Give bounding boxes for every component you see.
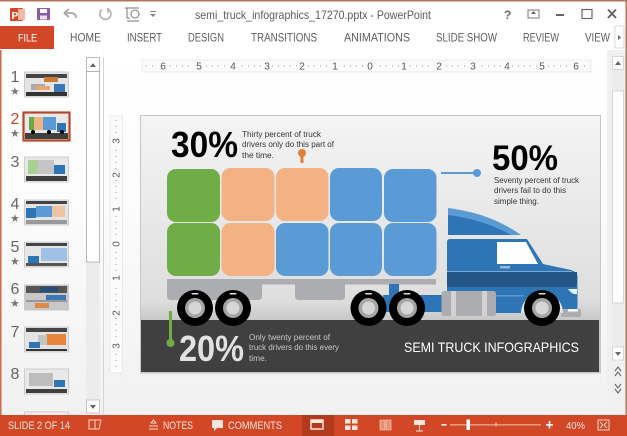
vertical ruler: 2: [112, 172, 122, 178]
horizontal ruler: 5: [539, 62, 545, 72]
ribbon tabs: REVIEW: [523, 32, 559, 44]
text: 50% description: drivers fail to do this: [494, 186, 566, 195]
thumbnail scrollbar: [86, 57, 100, 413]
text: 30% description: the time.: [242, 151, 274, 160]
stat: 30%: [171, 124, 335, 165]
horizontal ruler: 6: [573, 62, 579, 72]
door handle: [500, 266, 510, 268]
ribbon tabs: INSERT: [127, 32, 162, 44]
vertical ruler: 3: [112, 138, 122, 144]
slide numbers: 1: [11, 69, 20, 86]
main scrollbar: [607, 50, 626, 416]
thumbnail 8: [24, 369, 68, 394]
slide numbers: 5: [11, 239, 20, 256]
left border: [0, 50, 2, 416]
window title: semi_truck_infographics_17270.pptx - PowerPoint: [195, 8, 432, 22]
thumbnail 9 partial: [24, 412, 68, 418]
transition stars: [10, 86, 20, 310]
icon: save: [37, 8, 50, 20]
horizontal ruler: [142, 60, 591, 72]
trailer cargo boxes: [167, 168, 436, 276]
title bar: [0, 0, 627, 50]
icon: redo: [100, 8, 111, 19]
text: 50% description: [494, 176, 579, 206]
wheel: drive 2: [389, 290, 425, 326]
window: [497, 242, 538, 264]
horizontal ruler: 5: [196, 62, 202, 72]
ribbon tabs: HOME: [70, 32, 101, 44]
stat: 20%: [179, 328, 339, 369]
ribbon tabs: FILE: [18, 32, 37, 44]
icon: spelling book: [89, 420, 101, 429]
comments button: [212, 420, 282, 432]
horizontal ruler: 0: [367, 62, 373, 72]
fit to window button: [598, 420, 609, 430]
vertical ruler: 1: [112, 275, 122, 281]
text: 30% description: [242, 130, 335, 160]
slide numbers: 8: [11, 366, 20, 383]
transition stars: ★: [10, 213, 20, 225]
slide numbers: 7: [11, 324, 20, 341]
quick access dropdown: [150, 11, 156, 17]
ribbon tabs: [0, 26, 624, 49]
horizontal ruler: 3: [470, 62, 476, 72]
wheel: trailer 1: [177, 290, 213, 326]
icon: orange pin: [298, 149, 306, 163]
text: 30% description: Thirty percent of truck: [242, 130, 321, 139]
headlight: [568, 289, 577, 294]
status bar: [0, 415, 627, 436]
vertical ruler: 0: [112, 241, 122, 247]
text: 20% description: truck drivers do this every: [249, 343, 339, 352]
roof fairing: [448, 208, 521, 235]
fuel tank: [442, 291, 496, 316]
horizontal ruler: 2: [299, 62, 305, 72]
ribbon tabs: TRANSITIONS: [251, 32, 317, 44]
window controls: [504, 8, 616, 22]
wheels: [177, 290, 560, 326]
notes button: [149, 420, 193, 432]
stat: 20%: 20%: [179, 328, 244, 369]
thumbnail 3: [24, 157, 68, 182]
ribbon tabs: DESIGN: [188, 32, 224, 44]
footer band: [141, 320, 599, 372]
comments button: COMMENTS: [228, 420, 282, 432]
transition stars: ★: [10, 86, 20, 98]
slide sorter button: [345, 419, 358, 430]
transition stars: ★: [10, 256, 20, 268]
horizontal ruler: 2: [436, 62, 442, 72]
slide numbers: 2: [11, 111, 20, 128]
normal view button: [302, 415, 334, 436]
body crease: [496, 294, 524, 297]
slide numbers: 3: [11, 154, 20, 171]
slide: [140, 116, 600, 373]
truck cab: [442, 208, 581, 317]
window controls: ?: [504, 8, 511, 22]
icon: undo: [64, 9, 76, 18]
horizontal ruler: 4: [230, 62, 236, 72]
thumbnail 4: [24, 200, 68, 225]
zoom slider: [442, 420, 553, 430]
horizontal ruler: 4: [504, 62, 510, 72]
horizontal ruler: 1: [332, 62, 338, 72]
wheel arch: [521, 292, 563, 313]
ribbon tabs: VIEW: [585, 32, 610, 44]
text: 20% description: [249, 333, 339, 363]
wheel: front: [524, 290, 560, 326]
slide show button: [414, 420, 425, 431]
slide numbers: 6: [11, 281, 20, 298]
slide title: SEMI TRUCK INFOGRAPHICS: [404, 339, 579, 355]
connector: 20%: [166, 311, 174, 347]
transition stars: ★: [10, 128, 20, 140]
wheel: trailer 2: [215, 290, 251, 326]
wheel: drive 1: [350, 290, 386, 326]
stat: 50%: [492, 139, 579, 206]
zoom percent: 40%: [566, 420, 585, 432]
ribbon tabs: SLIDE SHOW: [436, 32, 497, 44]
stat: 30%: 30%: [171, 124, 238, 165]
icon: presenter: [125, 8, 139, 21]
notes button: NOTES: [163, 420, 193, 432]
trailer chassis: [167, 279, 436, 300]
thumbnail 6: [24, 285, 68, 310]
text: 30% description: drivers only do this part of: [242, 140, 335, 149]
vertical ruler: [110, 116, 122, 373]
reading view button: [380, 420, 391, 430]
text: 20% description: Only twenty percent of: [249, 333, 331, 342]
slide background: [140, 116, 600, 373]
slide numbers: 4: [11, 196, 20, 213]
horizontal ruler: 3: [264, 62, 270, 72]
text: 20% description: time.: [249, 354, 267, 363]
stat: 50%: 50%: [492, 139, 558, 178]
hitch: [383, 284, 448, 312]
text: 50% description: Seventy percent of truck: [494, 176, 579, 185]
cab body: [447, 239, 578, 313]
vertical ruler: 3: [112, 343, 122, 349]
connector: 50%: [441, 169, 481, 177]
vertical ruler: 2: [112, 310, 122, 316]
slide counter: SLIDE 2 OF 14: [8, 420, 70, 432]
thumbnail 1: [24, 72, 68, 97]
right border: [626, 0, 627, 416]
thumbnail 7: [24, 327, 68, 352]
icon: PowerPoint logo: [10, 8, 25, 22]
text: 50% description: simple thing.: [494, 197, 539, 206]
transition stars: ★: [10, 298, 20, 310]
bumper: [561, 309, 581, 317]
horizontal ruler: 6: [160, 62, 166, 72]
slide numbers: [11, 69, 20, 383]
horizontal ruler: 1: [401, 62, 407, 72]
thumbnail 5: [24, 242, 68, 267]
thumbnail 2 selected: [24, 112, 70, 140]
cab stripe: [447, 272, 577, 287]
icon: PowerPoint logo: P: [12, 11, 18, 22]
slide editing area: [104, 50, 607, 416]
thumbnail pane: [2, 50, 104, 418]
vertical ruler: 1: [112, 206, 122, 212]
ribbon tabs: ANIMATIONS: [344, 32, 410, 44]
